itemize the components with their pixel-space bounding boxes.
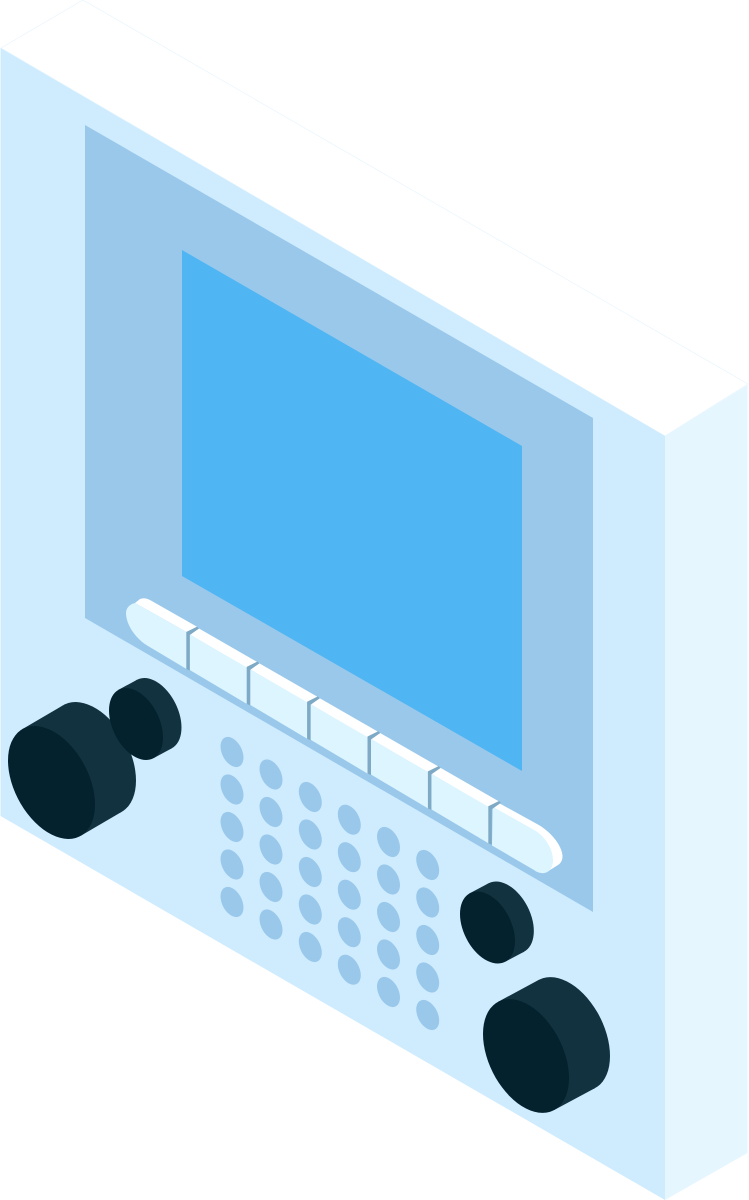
button 6: [431, 768, 501, 843]
left end button: [126, 598, 197, 669]
button 4: [311, 698, 380, 774]
speaker grille dots: [220, 732, 439, 1035]
button 2: [190, 628, 259, 704]
button strip: [126, 598, 562, 873]
device right side face: [665, 385, 748, 1200]
recessed display panel: [85, 125, 593, 912]
small right knob: [460, 861, 534, 984]
button 5: [371, 733, 440, 809]
button separators: [186, 627, 501, 845]
device top face: [1, 0, 748, 436]
small left knob: [109, 658, 181, 780]
screen: [182, 250, 522, 771]
large right knob: [483, 939, 610, 1151]
right end button: [492, 802, 562, 873]
button 3: [250, 663, 319, 739]
large left knob: [8, 664, 136, 877]
